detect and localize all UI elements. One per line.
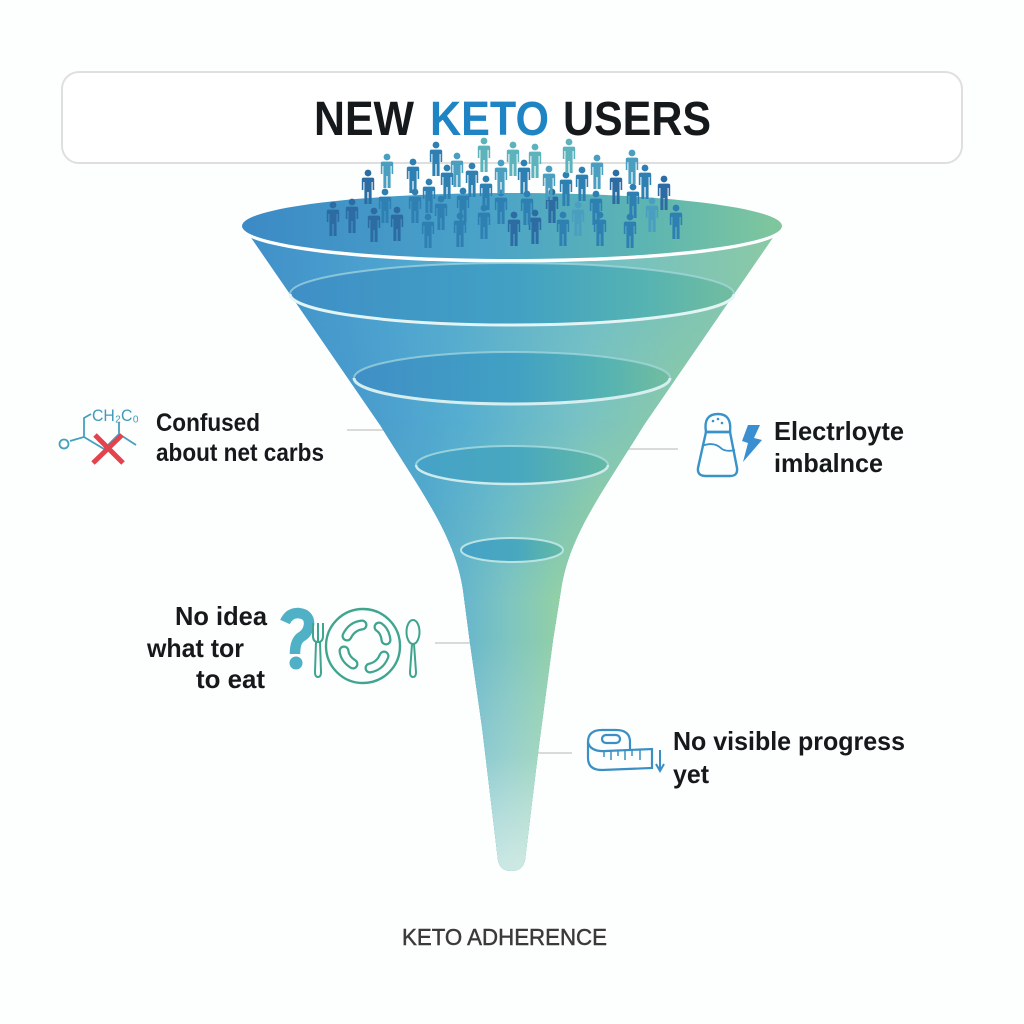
callout: no idea what to eat — [146, 601, 420, 694]
ring 4 — [416, 446, 608, 484]
footer label: KETO ADHERENCE — [402, 924, 607, 950]
ring 3 — [354, 352, 670, 404]
label — [146, 601, 268, 694]
label: to eat — [196, 664, 265, 694]
icon: down arrow — [656, 750, 664, 771]
icon: salt shaker and lightning — [698, 414, 762, 476]
ring 5 — [461, 538, 563, 562]
label: what tor — [146, 633, 244, 663]
label: Electrloyte — [774, 416, 904, 446]
connector: confused — [347, 429, 386, 431]
funnel — [230, 193, 800, 880]
label: No idea — [175, 601, 268, 631]
label: about net carbs — [156, 439, 324, 467]
icon: tape measure — [588, 730, 652, 770]
icon: plate with beans — [326, 609, 400, 683]
icon: fork — [313, 623, 323, 677]
label: Confused — [156, 409, 260, 437]
icon: molecule crossed out: CH₂C₀ — [92, 406, 139, 425]
callout: confused about net carbs — [60, 406, 324, 467]
icon: molecule crossed out — [60, 406, 139, 463]
title: KETO — [430, 93, 549, 146]
title: USERS — [563, 93, 711, 146]
label — [774, 416, 904, 478]
icon: question mark — [285, 613, 309, 670]
connector: no progress — [536, 752, 572, 754]
crowd of users — [327, 138, 682, 248]
title box — [62, 72, 962, 163]
icon: spoon — [406, 620, 420, 677]
funnel top rim — [242, 193, 782, 262]
label — [673, 726, 905, 789]
label: imbalnce — [774, 448, 883, 478]
funnel body — [251, 238, 773, 871]
connector: electrolyte — [620, 448, 678, 450]
callout: no progress — [588, 726, 905, 789]
title: NEW — [314, 93, 415, 146]
callout: electrolyte imbalance — [698, 414, 904, 478]
label — [156, 409, 324, 467]
ring 2 — [290, 263, 734, 325]
connector: no idea — [435, 642, 472, 644]
label: No visible progress — [673, 726, 905, 756]
title — [314, 93, 711, 146]
label: yet — [673, 759, 709, 789]
